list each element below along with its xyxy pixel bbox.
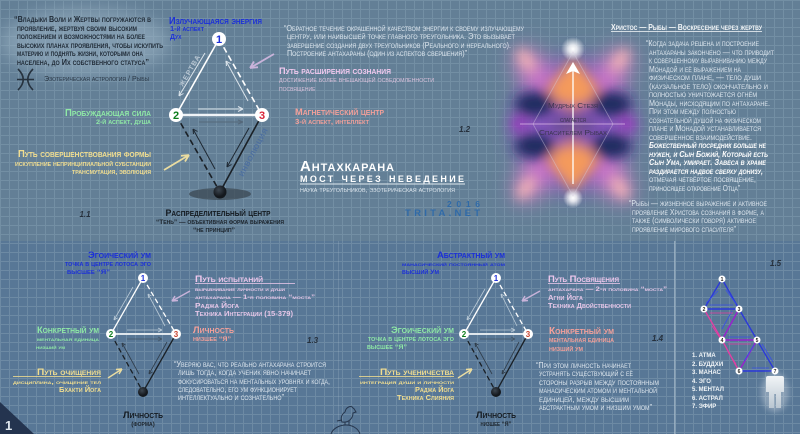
label: personality: Личность (193, 325, 234, 336)
text block: Pisces quote: “Рыбы — жизненное выражение и активное (629, 199, 767, 208)
diagram 1.3: egoic mind (106, 273, 181, 397)
text block: when the task is solved: раздирается надвое сверху донизу, (649, 167, 763, 176)
text block: when the task is solved: нужен, и Сын Божий, Который есть (649, 150, 769, 159)
text block: when the task is solved: антахараны закончено — что приводит (649, 48, 774, 57)
diagram 1.1: antahkarana triangles (169, 32, 270, 200)
radiant stars (561, 37, 585, 61)
panel 1.1: esoteric quote: Эзотерическая астрология / Рыбы (44, 76, 150, 83)
label: path of initiation: Агни Йога (548, 293, 583, 302)
text block: when the task is solved: отмечая четвёртое посвящение, (649, 175, 756, 184)
label: path of form perfection (15, 149, 151, 176)
label: distribution centre: “не принцип” (193, 227, 235, 234)
label: awakening force (65, 108, 151, 126)
node 2 (169, 108, 183, 122)
text block: when the task is solved: Божественный посредник больше не (649, 141, 767, 150)
label: concrete mind: низший ум (36, 345, 66, 351)
label: path of expanding consciousness (279, 66, 434, 93)
arrow: yellow (164, 155, 189, 170)
label: path of discipleship: Раджа Йога (415, 385, 454, 394)
node 3 (255, 108, 269, 122)
text block: when the task is solved: Монады, нисходящим по антахаране. (649, 99, 770, 108)
node 1 (212, 32, 226, 46)
panel 1.2: return current quote: Построение антахараны (один из аспектов свершения)” (287, 49, 467, 58)
label: egoic mind: высшее “Я” (67, 269, 110, 276)
text block: personality begins (536, 361, 659, 412)
diagram 1.3: egoic mind: 2 (109, 330, 114, 339)
diagram 1.5: seven principles lattice: 3 (738, 307, 741, 313)
text block: when the task is solved: плане и Монадой устанавливается (649, 124, 761, 133)
label: magnetic centre: Магнетический центр (295, 107, 384, 118)
arrow: yellow small (108, 369, 122, 378)
label: awakening force: 2-й аспект, душа (96, 118, 151, 126)
label: awakening force: Пробуждающая сила (65, 108, 151, 119)
text block: I assure you: фокусироваться на ментальных уровнях и когда, (178, 377, 330, 386)
text block: when the task is solved: приносящее откровение Отца” (649, 184, 740, 193)
label: path of form perfection: трансмутация, эволюция (72, 169, 151, 176)
text block: when the task is solved: физическом плане, — тело души (649, 73, 761, 82)
panel 1.1: esoteric quote: населена, до Их собственного статуса” (17, 58, 149, 67)
label: concrete mind (36, 325, 99, 351)
legend: seven principles (692, 353, 724, 410)
label: abstract mind (402, 250, 506, 276)
label: personality (193, 325, 234, 343)
figure number 1.3: 1.3 (307, 336, 319, 345)
text block: I assure you (174, 360, 330, 402)
legend: seven principles: 4. ЭГО (692, 379, 711, 385)
legend: seven principles: 7. ЭФИР (692, 404, 716, 410)
label: path of discipleship: Путь ученичества (380, 367, 455, 377)
arrow: lilac (250, 54, 274, 68)
panel 1.1: esoteric quote (0, 8, 170, 90)
label: personality form (123, 410, 163, 428)
label: path of trials (195, 274, 315, 318)
label: egoic mind 1.4 (367, 325, 454, 351)
title block (300, 158, 480, 219)
label: distribution centre: Распределительный центр (166, 208, 271, 219)
label: path of trials: антахарана — 1-я половина “моста” (195, 295, 315, 301)
text block: when the task is solved: Сын Ума, умирает. Завеса в храме (649, 158, 767, 167)
label: path of trials: Путь испытаний (195, 274, 263, 284)
title block: TRITA.NET (405, 208, 480, 219)
legend: seven principles: 6. АСТРАЛ (692, 396, 723, 402)
label: path of expanding consciousness: достижение более внешающей осведомленности (279, 76, 434, 84)
text block: when the task is solved: совершенное взаимодействие. (649, 133, 752, 142)
label: abstract mind: Абстрактный ум (437, 250, 505, 261)
text block: when the task is solved: (каузальное тело) окончательно и (649, 82, 768, 91)
arrow: yellow small 1.4 (458, 369, 472, 378)
text block: when the task is solved: При этом между полностью (649, 107, 736, 116)
label: path of trials: выравнивание личности и души (195, 287, 285, 293)
diagram 1.3: egoic mind: 3 (174, 330, 179, 339)
legend: seven principles: 3. МАНАС (692, 370, 722, 376)
text block: personality begins: абстрактным умом и низшим умом” (539, 403, 652, 412)
text block: personality begins: стороны разрыв между постоянным (539, 378, 659, 387)
text block: Pisces quote: проявление мирового спасителя” (632, 225, 736, 234)
panel 1.1: esoteric quote: положением и возможностями на более (17, 32, 145, 41)
label: concrete mind 1.4 (549, 326, 614, 353)
label: distribution centre: “Тень” — объективная форма выражения (156, 219, 284, 226)
label: concrete mind: ментальная единица (37, 337, 99, 343)
diagram 1.5: seven principles lattice: 4 (721, 338, 724, 344)
diagram 1.4: abstract mind: 1 (494, 274, 499, 283)
label: magnetic centre: 3-й аспект, интеллект (295, 118, 369, 126)
page corner number: 1 (5, 418, 12, 433)
label: personality lower self: низшее “Я” (480, 421, 512, 428)
text block: when the task is solved: сознательной душой на физическом (649, 116, 761, 125)
label: egoic mind: точка в центре лотоса эго (65, 261, 151, 268)
path arrows (179, 53, 249, 169)
figure number 1.5: 1.5 (770, 259, 782, 268)
label: concrete mind 1.4: низший ум (549, 345, 583, 353)
shadow ellipse (189, 188, 251, 200)
label: path of discipleship: интеграция души и личности (360, 380, 454, 386)
text block: when the task is solved: полностью уничтожается огнём (649, 90, 757, 99)
label: egoic mind 1.4: высшее “Я” (367, 344, 407, 351)
panel 1.2: return current quote: “Обратное течение окрашенной качеством энергии к своему излучающему (284, 24, 524, 33)
label: path of expanding consciousness: посвящение (279, 86, 316, 93)
label: path of expanding consciousness: Путь расширения сознания (279, 66, 391, 77)
text block: when the task is solved (646, 39, 774, 193)
node 2: 2 (173, 110, 179, 122)
legend: seven principles: 5. МЕНТАЛ (692, 387, 724, 393)
diagram 1.5: seven principles lattice: 2 (703, 307, 706, 313)
figure number 1.2: 1.2 (459, 125, 471, 134)
label: radiating energy: Излучающаяся энергия (169, 16, 262, 27)
label: concrete mind 1.4: Конкретный ум (549, 326, 614, 337)
panel 1.1: esoteric quote: “Владыки Воли и Жертвы погружаются в (14, 15, 152, 24)
figure number 1.4: 1.4 (652, 334, 664, 343)
page corner number (0, 402, 34, 434)
text block: I assure you: интеллектуально и сознательно” (178, 393, 284, 402)
diagram 1.5: seven principles lattice (700, 276, 778, 375)
label: path of purification (13, 367, 101, 394)
central arrow (572, 70, 574, 184)
text block: personality begins: “При этом личность начинает (536, 361, 631, 370)
label: path of purification: Бхакти Йога (59, 385, 101, 394)
heading: Christ Pisces resurrection: Христос — Рыбы — Воскресение через жертву (611, 23, 762, 32)
arrow: lilac small (172, 291, 190, 301)
icon: pisces symbol (17, 69, 34, 90)
label: personality form: Личность (123, 410, 163, 421)
icon: human figure (761, 372, 789, 412)
label: path of initiation (548, 274, 667, 310)
title block: мост через неведение (300, 170, 464, 185)
label: personality lower self: Личность (476, 410, 516, 421)
diagram 1.4: abstract mind (459, 273, 533, 397)
text block: when the task is solved: “Когда задача решена и построение (646, 39, 759, 48)
label: personality form: (форма) (131, 421, 155, 428)
diagram 1.4: abstract mind: 3 (526, 330, 531, 339)
label: abstract mind: манасический постоянный атом (402, 262, 506, 268)
label: radiating energy: Дух (170, 34, 182, 41)
label: path of discipleship: Техника Слияния (397, 395, 454, 402)
vertical label: жертва: ЖЕРТВА (178, 54, 203, 89)
label: path of initiation: Путь Посвящения (548, 274, 619, 284)
diagram 1.3: egoic mind: 1 (141, 274, 146, 283)
node 4 shadow ball (214, 186, 226, 198)
label: distribution centre (156, 208, 284, 234)
label: path of form perfection: искупление непринципиальной субстанции (15, 160, 151, 168)
legend: seven principles: 1. АТМА (692, 353, 716, 359)
node 1: 1 (216, 34, 222, 46)
diagram 1.5: seven principles lattice: 7 (774, 369, 777, 375)
text block: Pisces quote: также (символически говоря) активное (632, 216, 756, 225)
text block: when the task is solved: к совершенному выравниванию между (649, 56, 767, 65)
label: path of initiation: антахарана — 2-я половина “моста” (548, 287, 667, 293)
text block: I assure you: лишь тогда, когда ученик явно начинает (178, 368, 311, 377)
diagram 1.4: abstract mind: 2 (462, 330, 467, 339)
label: path of discipleship (359, 367, 455, 402)
panel 1.2: return current quote (284, 24, 524, 58)
panel 1.1: esoteric quote: высоких планах проявления, чтобы искупить (17, 41, 164, 50)
panel 1.1: esoteric quote: материю и поднять жизни, которыми она (17, 49, 144, 58)
legend: seven principles: 2. БУДДХИ (692, 362, 723, 368)
image: Christ radiant triangles (509, 37, 637, 208)
label: path of form perfection: Путь совершенствования формы (18, 149, 151, 160)
label: magnetic centre (295, 107, 384, 126)
icon: bird on ring (331, 407, 360, 434)
label: path of initiation: Техника Двойственности (548, 302, 631, 310)
label: radiating energy: 1-й аспект (170, 25, 204, 33)
label: egoic mind (65, 250, 151, 276)
faint triangles (533, 52, 613, 196)
text block: personality begins: единицей, между высшим (539, 395, 629, 404)
text block: when the task is solved: Монадой и её выражением на (649, 65, 741, 74)
diagram 1.5: seven principles lattice: 1 (721, 277, 724, 283)
label: radiating energy (169, 16, 262, 41)
text block: personality begins: устранять существующий с её (539, 369, 633, 378)
panel 1.2: return current quote: завершение создания двух треугольников (Реального и нереального). (287, 41, 511, 50)
label: path of purification: дисциплина, очищение тел (13, 380, 101, 386)
panel 1.2: return current quote: центру, или наивысшей точке главного треугольника. Это вызывает (287, 32, 515, 41)
text block: Pisces quote: проявление Христова сознания в форме, а (632, 208, 764, 217)
figure number 1.1: 1.1 (79, 210, 91, 219)
image: Christ radiant triangles: Мудрых Стезя (548, 103, 598, 110)
panel 1.1: esoteric quote: проявление, жертвуя своим высоким (17, 24, 137, 33)
text block: personality begins: манасическим атомом и ментальной (539, 386, 657, 395)
label: concrete mind 1.4: ментальная единица (549, 337, 614, 344)
label: personality lower self (476, 410, 516, 428)
label: path of purification: Путь очищения (37, 367, 101, 377)
label: abstract mind: высший Ум (402, 268, 439, 276)
title block: 2016 (447, 199, 480, 209)
title block: Антахкарана (300, 158, 394, 175)
arrow: lilac small 1.4 (522, 291, 540, 301)
title block: наука треугольников, эзотерическая астрология (300, 187, 455, 194)
diagram 1.5: seven principles lattice: 5 (756, 338, 759, 344)
label: egoic mind 1.4: Эгоический ум (391, 325, 454, 336)
label: personality: низшее “Я” (193, 336, 231, 343)
text block: Pisces quote (629, 199, 767, 234)
text block: I assure you: следовательно, его ум функционирует (178, 385, 297, 394)
label: concrete mind: Конкретный ум (37, 325, 99, 336)
image: Christ radiant triangles: слагается (560, 117, 586, 124)
text block: I assure you: “Уверяю вас, что реально антахарана строится (174, 360, 326, 369)
vertical label: инволюция: ИНВОЛЮЦИЯ (239, 127, 270, 178)
node 3: 3 (259, 110, 265, 122)
label: path of trials: Раджа Йога (195, 301, 239, 310)
image: Christ radiant triangles: Спасителем Рыбах (539, 130, 608, 137)
label: egoic mind: Эгоический ум (88, 250, 151, 261)
label: egoic mind 1.4: точка в центре лотоса эго (368, 336, 454, 343)
diagram 1.5: seven principles lattice: 6 (738, 369, 741, 375)
label: path of trials: Техника Интеграции (15-379) (195, 311, 293, 318)
